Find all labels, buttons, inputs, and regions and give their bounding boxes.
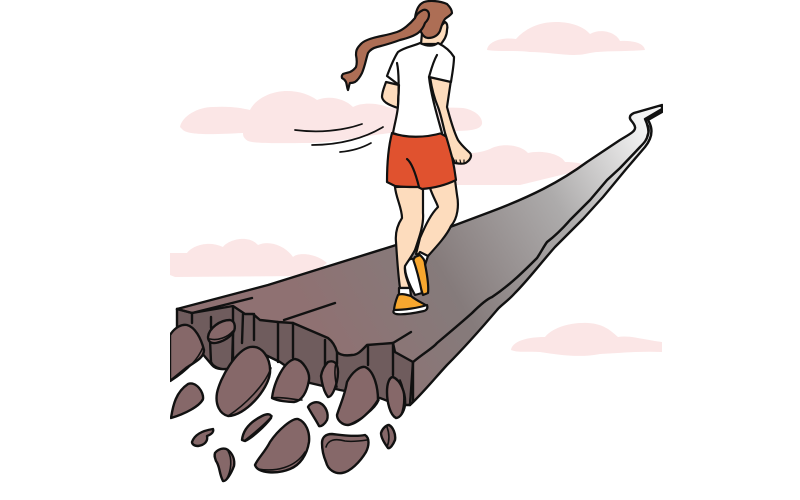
rock 9 <box>242 414 271 441</box>
neck and ear <box>421 22 447 44</box>
motion lines <box>295 124 383 152</box>
clouds <box>170 22 662 356</box>
cliff cracks <box>177 307 413 402</box>
surface cracks <box>192 298 411 343</box>
road <box>170 105 662 481</box>
rock 11 <box>192 429 213 446</box>
rock 15 <box>381 425 395 448</box>
back leg <box>416 180 458 256</box>
near arm <box>430 77 471 164</box>
cloud: lower left <box>170 239 327 277</box>
hair bun <box>415 1 452 38</box>
rock 6 <box>387 377 405 418</box>
cloud: lower right <box>511 323 662 356</box>
cloud: middle right <box>450 145 590 185</box>
rock highlights <box>171 331 404 480</box>
hair <box>342 1 452 90</box>
illustration: runner on crumbling road <box>170 0 663 482</box>
rock 12 <box>215 449 234 481</box>
rock 14 <box>322 434 368 473</box>
front shoe <box>393 288 427 314</box>
rock 3 <box>272 359 309 402</box>
cloud: top right <box>487 22 645 55</box>
shorts <box>387 133 456 189</box>
gap between legs, road seen behind <box>410 236 421 256</box>
rock 1 <box>170 325 204 381</box>
cloud: middle left <box>180 91 482 143</box>
cliff front face <box>177 305 414 405</box>
runner <box>295 1 471 314</box>
shirt <box>387 43 454 137</box>
cylinder rock base <box>210 333 233 369</box>
rocks <box>170 320 405 481</box>
rock 7 <box>208 320 235 343</box>
rock 2 <box>217 347 270 416</box>
rock 4 <box>321 361 338 397</box>
ponytail <box>342 10 429 90</box>
front leg <box>395 186 423 288</box>
rock 10 <box>308 402 328 426</box>
road side face <box>410 109 662 405</box>
road top surface <box>177 105 662 362</box>
fingers <box>456 160 464 164</box>
rock 13 <box>255 419 309 472</box>
rock 5 <box>337 367 378 425</box>
rock 8 <box>171 383 203 418</box>
back shoe <box>405 252 428 295</box>
far arm <box>382 82 399 108</box>
